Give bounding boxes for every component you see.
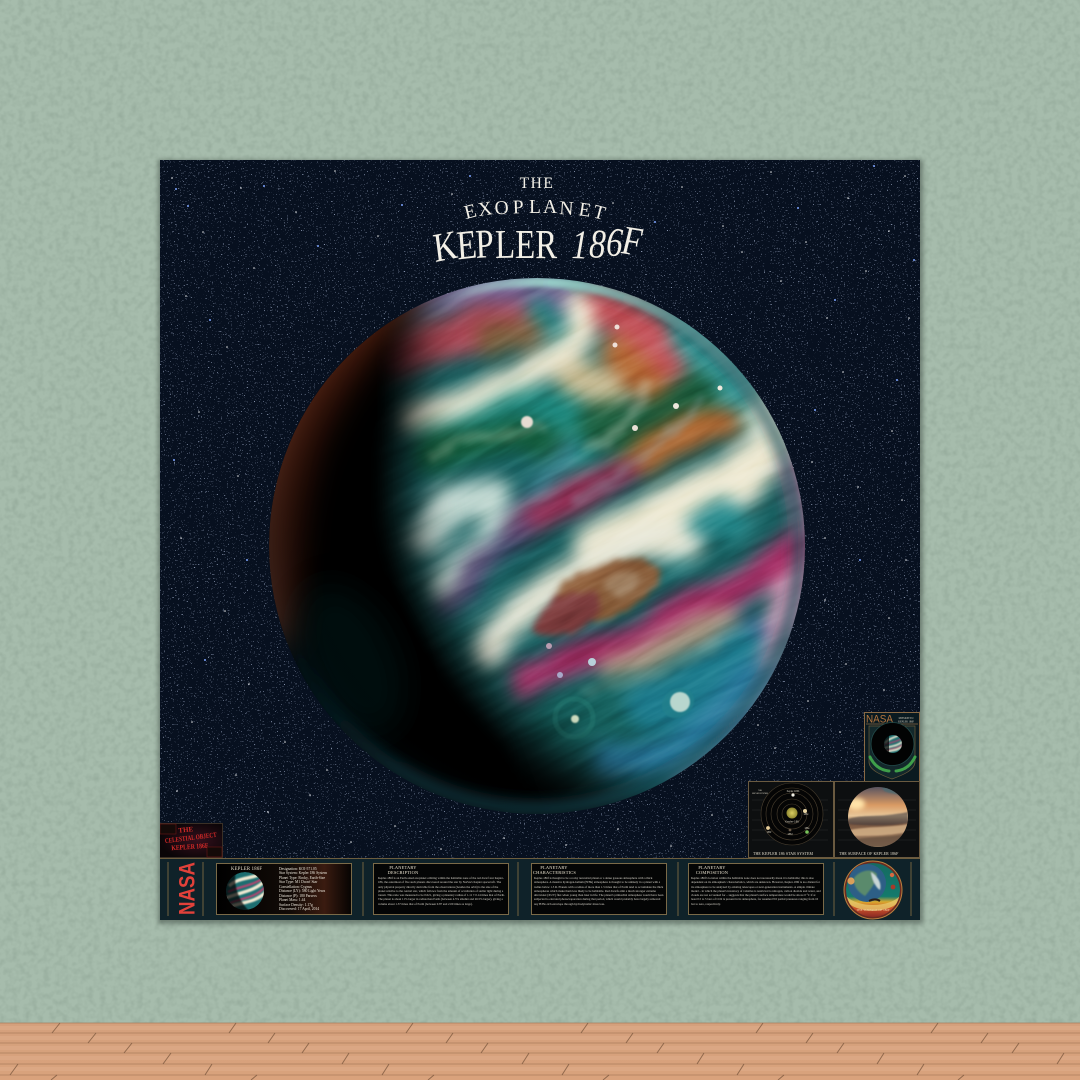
star system labels: Kepler-186 (785, 820, 799, 824)
text: characteristics: Kepler-186f is thought to be a rocky terrestrial planet or a dense gaseous atmosphere with a thick atmosphere. A massive hydrogen-helium (H/He) atmosphere is thought to be unlikely in a planet with a radius below 1.5 R. Planets with a radius of more than 1.5 times that of Earth tend to accumulate the thick atmospheres which make them less likely to be habitable. Red dwarfs emit a much stronger extreme ultraviolet (XUV) flux when young than later in life. The planet's primordial atmosphere would have been subjected to elevated photoevaporation during that period, which would probably have largely removed any H/He-rich envelope through hydrodynamic mass loss. (534, 876, 663, 906)
thumbnail title: KEPLER 186F (231, 867, 262, 872)
night side shadow (366, 296, 663, 814)
planet specification list: Distance (LY): 580 Light Years (279, 889, 325, 893)
planet specification list: Constellation: Cygnus (279, 885, 312, 889)
limb shading (269, 370, 336, 716)
planet specification list: Star Type: M1 Dwarf Star (279, 880, 317, 884)
heading: planetary characteristics: PLANETARY (540, 864, 568, 870)
star system labels (752, 790, 810, 836)
panel: star system diagram (748, 782, 834, 858)
badge: laurels (870, 757, 915, 771)
caption: THE SURFACE OF KEPLER 186F (839, 852, 899, 856)
heading: planetary description: DESCRIPTION (388, 870, 418, 875)
heading: planetary characteristics (533, 864, 576, 875)
star system labels: KEPLER SYSTEM (752, 793, 768, 795)
orbit rings (761, 783, 823, 845)
planet specification list: Designation: KOI-571.05 (279, 866, 317, 870)
planet specification list: Distance (P): 180 Parsecs (279, 894, 317, 898)
title line: EXOPLANET: EXOPLANET (462, 197, 608, 225)
badge: crest (869, 726, 915, 779)
dark teal glow on lower night side (310, 594, 398, 724)
planet specification list (279, 866, 327, 911)
mission badge (864, 712, 920, 782)
night side core (250, 300, 540, 840)
badge: planet (884, 735, 902, 753)
panel: planet data (216, 864, 352, 914)
caption: THE KEPLER 186 STAR SYSTEM (753, 852, 814, 856)
poster (160, 160, 920, 920)
heading: planetary description: PLANETARY (389, 864, 417, 870)
title line: THE: THE (520, 175, 554, 192)
badge: caption: MISSION TO (899, 717, 913, 720)
orange storm (529, 553, 664, 640)
star system labels: 186f (767, 832, 772, 834)
information strip (160, 858, 920, 920)
heading: planetary composition: COMPOSITION (696, 870, 728, 875)
badge: NASA wordmark: NASA (866, 714, 894, 726)
red rim on night side (269, 293, 450, 650)
medallion globe (848, 864, 886, 902)
poster shadow (158, 160, 923, 924)
sunlit top rim (430, 278, 757, 400)
title (432, 178, 644, 262)
planet specification list: Discovered: 17 April, 2014 (279, 907, 319, 911)
panel: characteristics (532, 864, 666, 914)
heading: planetary composition (696, 864, 728, 875)
panel: composition (688, 864, 824, 914)
star system labels: Kepler-186b (787, 790, 800, 793)
planet specification list: Star System: Kepler 186 System (279, 871, 327, 875)
heading: planetary description (388, 864, 418, 875)
star field (160, 160, 920, 920)
planet (269, 278, 805, 814)
teal rim on lower night side (274, 283, 800, 809)
speckled cloud details (430, 385, 720, 690)
medallion (844, 861, 902, 919)
heading: planetary composition: PLANETARY (698, 864, 726, 870)
planet base colour (380, 278, 801, 799)
title line: KEPLER 186F (432, 226, 644, 262)
flowing streak texture (408, 282, 805, 776)
star system labels: 186c (804, 814, 809, 816)
small red title panel: CELESTIAL OBJECT (164, 831, 217, 845)
medallion legend: THE SURFACE OF 186F (856, 908, 890, 912)
mission badge: KEPLER 186F (898, 720, 914, 724)
NASA worm logo: NASA (174, 862, 200, 915)
panel: description (374, 864, 508, 914)
text: description: Kepler-186f is an Earth-sized exoplanet orbiting within the habitable zone of the red dwarf star Kepler-186, the outermost of five such planets discovered around the star by NASA's Kepler spacecraft. The only physical property directly derivable from the observations (besides the orbit) is the size of the planet relative to the central star, which follows from the amount of occultation of stellar light during a transit. This ratio was measured to be 0.021, giving a planetary radius of 1.11 ± 0.14 times that of Earth. The planet is about 11% larger in radius than Earth (between 4.5% smaller and 26.5% larger), giving a volume about 1.37 times that of Earth (between 0.87 and 2.00 times as large). (378, 876, 505, 906)
title line: KEPLER 186F: 186F (571, 218, 644, 269)
small red title panel (160, 824, 222, 858)
surface landscape (847, 787, 908, 847)
thumbnail planet (226, 872, 264, 910)
small red title panel: KEPLER 186F (171, 842, 209, 852)
central star (786, 808, 798, 818)
planet specification list: Surface Density: 1.17g (279, 903, 313, 907)
planet specification list: Planet Mass: 1.44 (279, 898, 305, 902)
storm eyes and spots (521, 324, 722, 737)
title line: KEPLER 186F: KEPLER (431, 222, 557, 272)
small red title panel: THE (178, 825, 194, 835)
orbiting planets (766, 793, 809, 834)
planet specification list: Planet Type: Rocky, Earth-Size (279, 876, 325, 880)
heading: planetary characteristics: CHARACTERISTICS (533, 870, 576, 875)
text: composition: Kepler-186f's location within the habitable zone does not necessarily mean it is habitable; this is also dependent on its atmospheric characteristics, which are unknown. However, Kepler-186f is too distant for its atmosphere to be analyzed by existing telescopes or next-generation instruments. A simple climate model – in which the planet's inventory of volatiles is restricted to nitrogen, carbon dioxide and water, and clouds are not accounted for – suggests that the planet's surface temperature would be above 0 °C if at least 0.5 to 5 bars of CO2 is present in its atmosphere, for assumed N2 partial pressures ranging from 10 bar to zero, respectively. (691, 876, 821, 906)
panel: surface view (834, 782, 920, 858)
wooden floor (0, 1023, 1080, 1080)
star system labels: THE (758, 790, 763, 792)
star system labels: 186e (804, 828, 810, 830)
star system labels: 186d (787, 834, 793, 836)
atmospheric bands (395, 288, 810, 785)
